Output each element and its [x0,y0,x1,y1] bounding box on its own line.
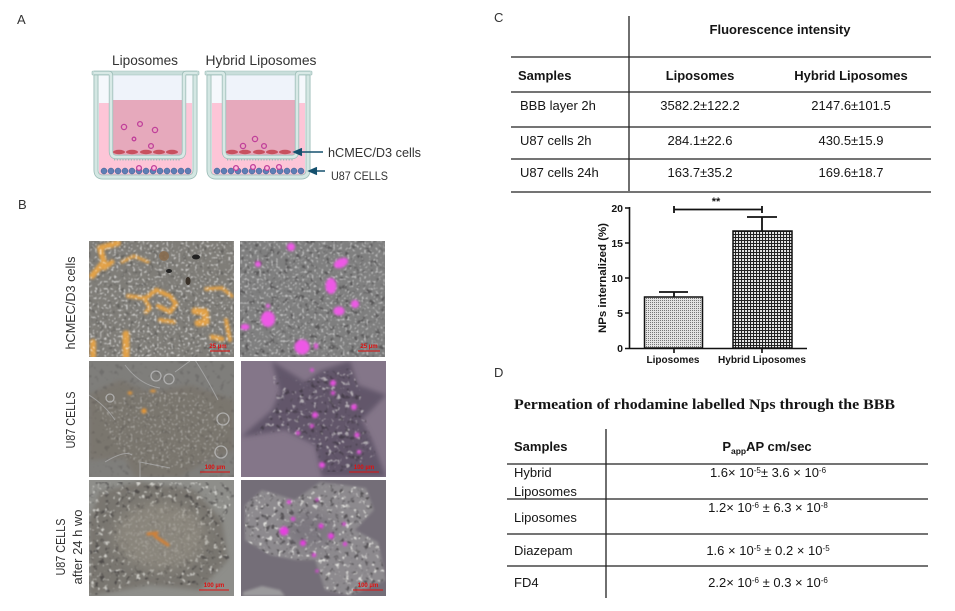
panel B: microscopy grid [18,197,386,596]
bar chart: NPs internalized [597,196,807,366]
y tick labels: 5 [617,308,623,320]
table row: Liposomes [514,500,828,525]
table column headers: app [731,446,746,456]
table column headers: P [722,439,731,454]
row label: U87 CELLS after 24 h wo: U87 CELLS [53,518,68,576]
table row: FD4: -6 [752,576,760,585]
table row: U87 cells 24h: 163.7±35.2 [668,165,732,180]
bar: Hybrid Liposomes [733,231,792,348]
table row: Diazepam [514,543,830,558]
table grid lines [511,16,931,192]
bar: Liposomes [644,297,702,348]
left transwell with liposomes [92,71,199,177]
table row: BBB layer 2h: BBB layer 2h [520,98,596,113]
table column headers: Samples [514,439,567,454]
table row: U87 cells 24h [520,165,883,180]
panel letter A: A [17,12,26,27]
table column headers: AP cm/sec [746,439,812,454]
y tick labels: 15 [611,238,623,250]
heading: Liposomes: Liposomes [112,52,178,68]
scale bar 100 µm: 100 µm [205,465,225,471]
table row: BBB layer 2h [520,98,891,113]
table row: FD4: FD4 [514,575,539,590]
micrograph: hCMEC/D3 liposomes, orange signal [89,241,234,357]
scale bar 100 µm: 100 µm [204,583,224,589]
arrow to hCMEC/D3 cells [294,148,323,156]
row label: U87 CELLS: U87 CELLS [63,391,78,448]
table column headers: Samples [518,68,571,83]
table row: FD4 [514,575,828,590]
table column headers [514,439,812,456]
label: U87 CELLS: U87 CELLS [331,169,388,183]
micrograph: U87 hybrid liposomes [241,361,386,477]
scale bar 25 µm: 25 µm [209,344,227,350]
scale bar 100 µm: 100 µm [354,465,374,471]
micrograph: U87 liposomes after 24 h washout [89,480,234,596]
error bar: Hybrid Liposomes [747,217,777,231]
micrograph: hCMEC/D3 hybrid liposomes, magenta signal [240,241,385,357]
table row: U87 cells 24h: U87 cells 24h [520,165,599,180]
table row: Liposomes: Liposomes [514,510,577,525]
scale bar 100 µm [349,465,379,472]
table row: Liposomes: -8 [821,501,828,510]
row label: hCMEC/D3 cells: hCMEC/D3 cells [63,256,78,350]
panel C: fluorescence table [494,10,931,192]
row label: U87 CELLS after 24 h wo [53,510,85,584]
y tick labels: 20 [611,203,623,215]
table row: Hybrid Liposomes: Hybrid [514,465,552,480]
panel D: permeation table [494,365,928,598]
table row: BBB layer 2h: 3582.2±122.2 [660,98,740,113]
table row: Liposomes: -6 [752,501,760,510]
significance bracket [674,206,762,213]
table row: Hybrid Liposomes [514,465,827,499]
scale bar 25 µm [358,344,380,351]
table row: Liposomes: 1.2× 10 [708,500,752,515]
panel letter C: C [494,10,503,25]
panel letter B: B [18,197,27,212]
x tick labels: Hybrid Liposomes [718,355,806,366]
table row: U87 cells 2h: 284.1±22.6 [668,133,732,148]
table row: Hybrid Liposomes: -6 [819,466,827,475]
axes and ticks [625,207,807,353]
table row: FD4: -6 [821,576,828,585]
table row: Hybrid Liposomes: Liposomes [514,484,577,499]
table title: Permeation of rhodamine labelled Nps through the BBB [514,397,895,413]
table row: Hybrid Liposomes: 1.6× 10 [710,465,754,480]
micrograph: U87 liposomes [89,360,234,477]
micrograph: U87 hybrid liposomes after 24 h washout [241,480,386,596]
panel letter D: D [494,365,503,380]
table row: FD4: ± 0.3 × 10 [759,575,821,590]
y axis title: NPs internalized (%) [597,223,609,333]
scale bar 100 µm [200,465,230,472]
scale bar 25 µm: 25 µm [360,344,378,350]
label: hCMEC/D3 cells: hCMEC/D3 cells [328,146,421,160]
scale bar 100 µm [199,583,229,590]
table row: Hybrid Liposomes: ± 3.6 × 10 [761,465,819,480]
table column headers: Hybrid Liposomes [794,68,908,83]
table row: Diazepam: 1.6 × 10 [706,543,754,558]
table row: FD4: 2.2× 10 [708,575,752,590]
table column headers [518,68,908,83]
heading: Hybrid Liposomes: Hybrid Liposomes [206,52,316,68]
arrow to U87 cells [309,168,325,174]
table header: Fluorescence intensity: Fluorescence intensity [710,22,851,37]
table column headers: Liposomes [666,68,734,83]
error bar: Liposomes [659,292,688,297]
table row: Diazepam: Diazepam [514,543,573,558]
right transwell with hybrid liposomes [205,71,312,177]
table row: U87 cells 24h: 169.6±18.7 [819,165,883,180]
table row: Diazepam: -5 [754,544,761,553]
row label: U87 CELLS after 24 h wo: after 24 h wo [70,510,85,584]
table grid lines [507,429,928,598]
table row: Diazepam: ± 0.2 × 10 [761,543,823,558]
y tick labels: 0 [617,343,623,355]
scale bar 100 µm: 100 µm [358,583,378,589]
table row: Hybrid Liposomes: -5 [754,466,761,475]
y tick labels: 10 [611,273,623,285]
panel A: transwell diagram [17,12,421,183]
x tick labels [646,355,806,366]
table row: U87 cells 2h: U87 cells 2h [520,133,592,148]
table row: U87 cells 2h: 430.5±15.9 [819,133,883,148]
table row: BBB layer 2h: 2147.6±101.5 [811,98,891,113]
table row: Diazepam: -5 [823,544,830,553]
significance stars: ** [712,196,721,208]
table row: Liposomes: ± 6.3 × 10 [759,500,821,515]
y tick labels [611,203,623,355]
scale bar 100 µm [353,583,383,590]
table row: U87 cells 2h [520,133,883,148]
x tick labels: Liposomes [646,355,700,366]
